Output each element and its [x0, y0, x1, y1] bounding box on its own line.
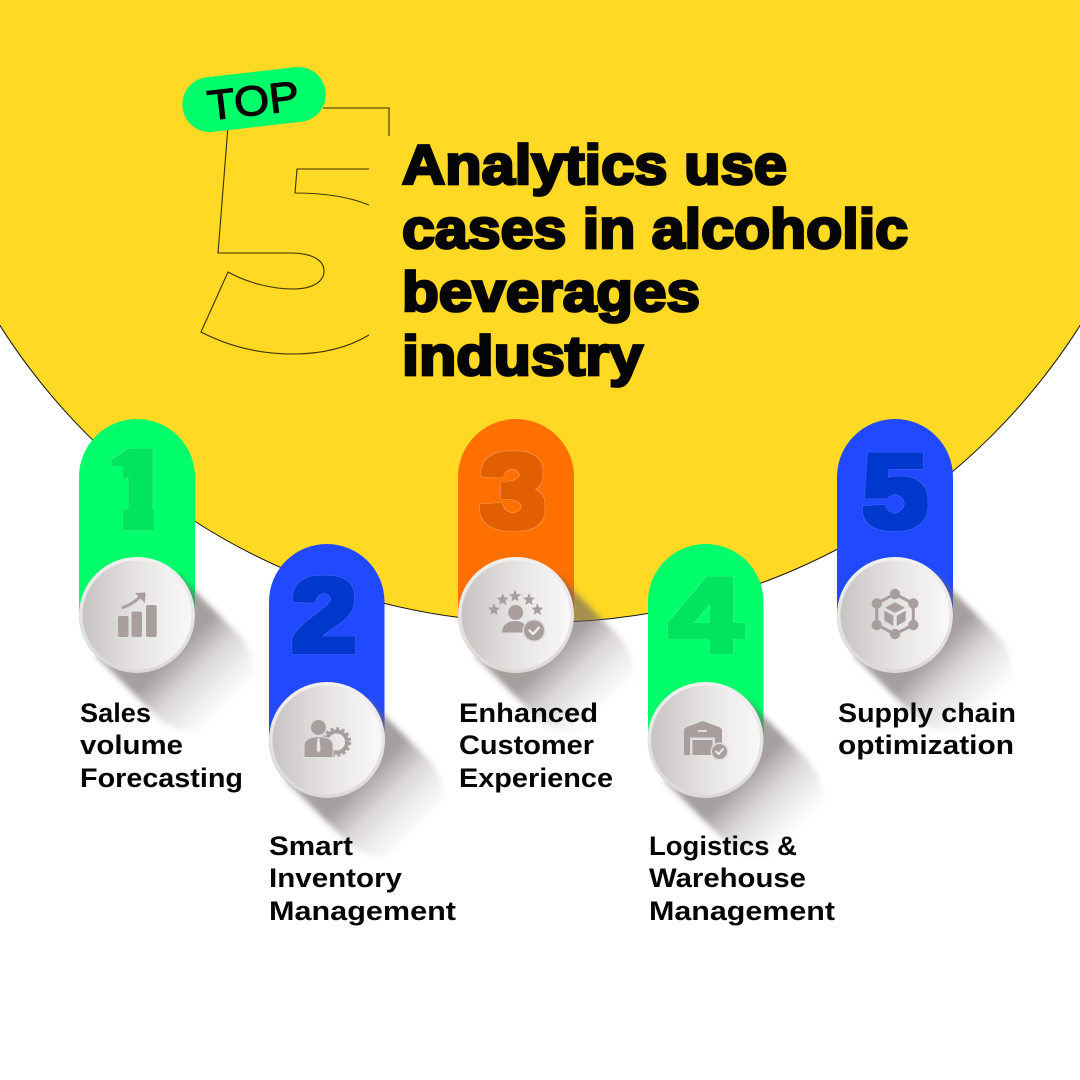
label: Enhanced: [459, 698, 598, 728]
label: Smart: [269, 831, 353, 861]
label: Warehouse: [649, 863, 806, 893]
TOP badge: TOP: [205, 72, 302, 129]
item 1: sales volume forecasting: [79, 419, 254, 793]
TOP badge: [179, 64, 329, 135]
label: [838, 698, 1016, 760]
blue pill: [837, 419, 953, 673]
label: Sales: [80, 698, 151, 728]
green pill: [648, 544, 764, 798]
green pill: [79, 419, 195, 673]
label: optimization: [838, 730, 1014, 760]
icon: person with gear: [304, 720, 350, 758]
icon: cube network: [872, 589, 918, 639]
button shadow: [854, 574, 1012, 732]
button shadow: [475, 574, 633, 732]
label: volume: [80, 730, 183, 760]
digit 5: 5: [862, 434, 928, 550]
title: [402, 133, 908, 387]
icon: warehouse with check: [684, 721, 728, 760]
item 4: logistics and warehouse management: [648, 544, 835, 926]
digit 1: 1: [109, 432, 167, 548]
label: [80, 698, 243, 793]
button shadow: [664, 699, 823, 857]
button shadow: [286, 699, 444, 857]
title: Analytics use: [402, 133, 787, 196]
button: [458, 557, 574, 673]
label: Experience: [459, 763, 613, 793]
label: Supply chain: [838, 698, 1016, 728]
button: [837, 557, 953, 673]
digit 2: 2: [291, 558, 357, 674]
label: [459, 698, 613, 793]
label: Management: [649, 896, 835, 926]
item 3: enhanced customer experience: [458, 419, 633, 793]
blue pill: [269, 544, 384, 798]
label: Management: [269, 896, 456, 926]
button: [269, 682, 385, 798]
yellow background circle: [0, 0, 1080, 622]
button shadow: [96, 574, 254, 732]
label: [269, 831, 456, 926]
label: Customer: [459, 730, 595, 760]
orange pill: [458, 419, 574, 673]
item 2: smart inventory management: [269, 544, 456, 926]
item 5: supply chain optimization: [837, 419, 1016, 760]
title: cases in alcoholic: [402, 197, 908, 260]
digit 4: 4: [669, 558, 743, 674]
outlined number 5: [201, 108, 389, 354]
button: [648, 682, 764, 798]
button: [79, 557, 195, 673]
label: Logistics &: [649, 831, 797, 861]
icon: customer with star rating: [488, 590, 546, 642]
icon: rising bar chart: [118, 592, 157, 637]
label: Inventory: [269, 863, 402, 893]
title: industry: [402, 324, 643, 387]
label: Forecasting: [80, 763, 243, 793]
title: beverages: [402, 260, 700, 323]
label: [649, 831, 835, 926]
digit 3: 3: [480, 434, 546, 550]
